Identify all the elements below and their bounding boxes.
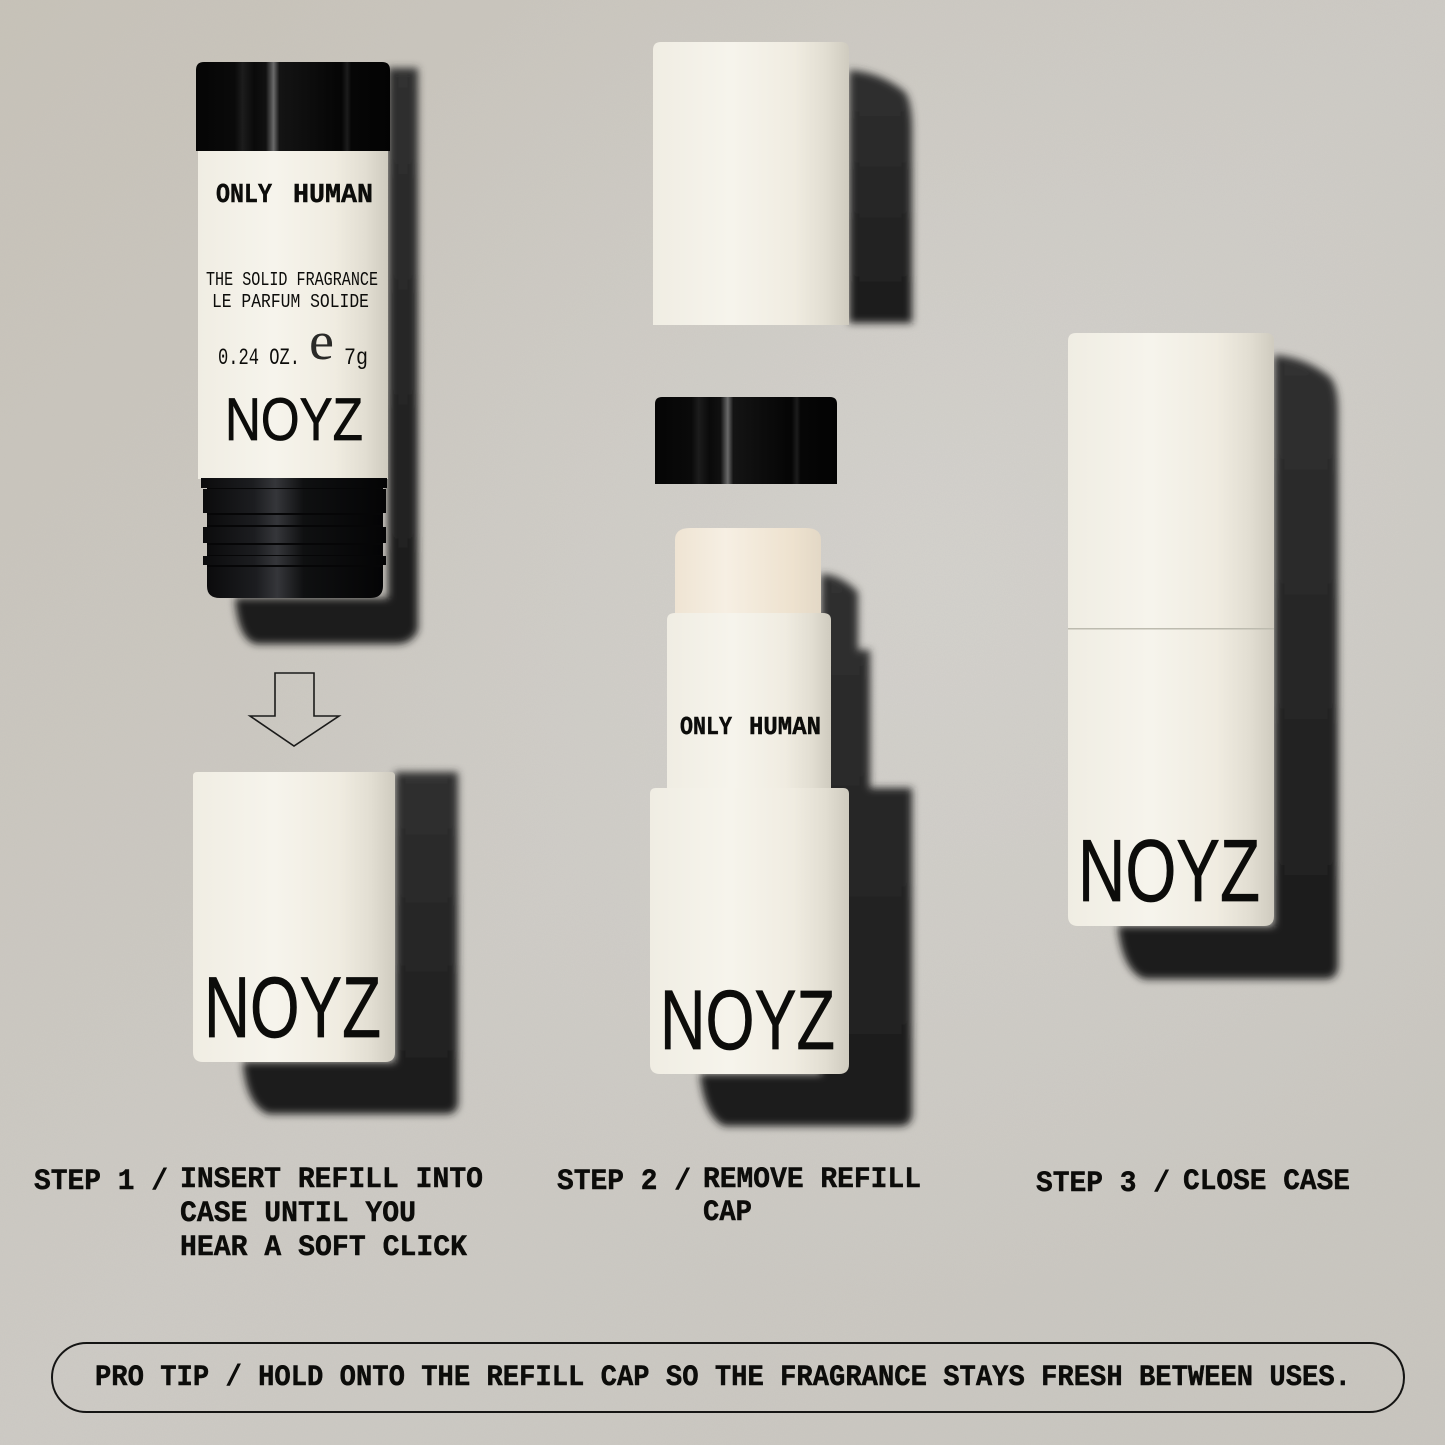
refill product name: HUMAN bbox=[293, 181, 373, 211]
case body bbox=[193, 772, 395, 1062]
callout: pro tip bbox=[52, 1343, 1404, 1412]
text block: step 1: CASE UNTIL YOU bbox=[180, 1197, 416, 1231]
fragrance wax bbox=[675, 528, 821, 613]
stick shadow bbox=[700, 574, 912, 1126]
refill descriptor bbox=[206, 269, 378, 313]
inner tube bbox=[667, 613, 831, 788]
text block: step 2 bbox=[557, 1163, 921, 1230]
text block: step 2: CAP bbox=[703, 1196, 752, 1230]
lid body bbox=[653, 42, 849, 325]
refill weight: e bbox=[309, 311, 334, 371]
text block: step 3: STEP 3 / bbox=[1036, 1167, 1170, 1201]
panel: step 2 outer lid bbox=[653, 42, 912, 325]
text block: step 1: INSERT REFILL INTO bbox=[180, 1163, 483, 1197]
refill NOYZ logo: NOYZ bbox=[225, 386, 363, 453]
refill cap bbox=[196, 62, 390, 151]
panel: step 2 opened stick in case bbox=[650, 528, 912, 1126]
case body bbox=[650, 788, 849, 1074]
refill product name bbox=[216, 181, 373, 211]
inner tube product name bbox=[680, 712, 821, 742]
panel: step 3 closed case bbox=[1068, 333, 1338, 979]
callout: pro tip: PRO TIP / HOLD ONTO THE REFILL CAP SO THE FRAGRANCE STAYS FRESH BETWEEN USES. bbox=[95, 1361, 1351, 1395]
closed case shadow bbox=[1118, 355, 1338, 979]
refill weight: 0.24 OZ. bbox=[218, 345, 300, 371]
inner tube product name: HUMAN bbox=[749, 712, 821, 742]
text block: step 2: STEP 2 / bbox=[557, 1165, 691, 1199]
refill descriptor: THE SOLID FRAGRANCE bbox=[206, 269, 378, 291]
case shadow bbox=[243, 772, 458, 1114]
refill product name: ONLY bbox=[216, 181, 273, 211]
text block: step 3: CLOSE CASE bbox=[1183, 1165, 1350, 1199]
text block: step 1 bbox=[34, 1163, 483, 1265]
text block: step 1: STEP 1 / bbox=[34, 1165, 168, 1199]
closed case NOYZ logo: NOYZ bbox=[1078, 821, 1260, 920]
panel: step 1 refill stick with shadow bbox=[196, 62, 418, 644]
refill weight bbox=[218, 311, 368, 371]
panel: step 1 open case bbox=[193, 772, 458, 1114]
closed case body bbox=[1068, 333, 1274, 926]
refill weight: 7g bbox=[344, 345, 368, 371]
refill descriptor: LE PARFUM SOLIDE bbox=[212, 291, 369, 313]
text block: step 2: REMOVE REFILL bbox=[703, 1163, 921, 1197]
refill label body bbox=[198, 151, 388, 479]
text block: step 3 bbox=[1036, 1165, 1350, 1201]
case NOYZ logo: NOYZ bbox=[204, 960, 381, 1056]
case NOYZ logo: NOYZ bbox=[660, 973, 835, 1067]
arrow: down bbox=[250, 673, 339, 746]
refill shadow bbox=[235, 68, 418, 644]
lid shadow bbox=[849, 70, 912, 323]
text block: step 1: HEAR A SOFT CLICK bbox=[180, 1231, 467, 1265]
refill threaded base bbox=[201, 478, 387, 598]
inner tube product name: ONLY bbox=[680, 712, 732, 742]
panel: step 2 black refill cap bbox=[655, 397, 837, 484]
